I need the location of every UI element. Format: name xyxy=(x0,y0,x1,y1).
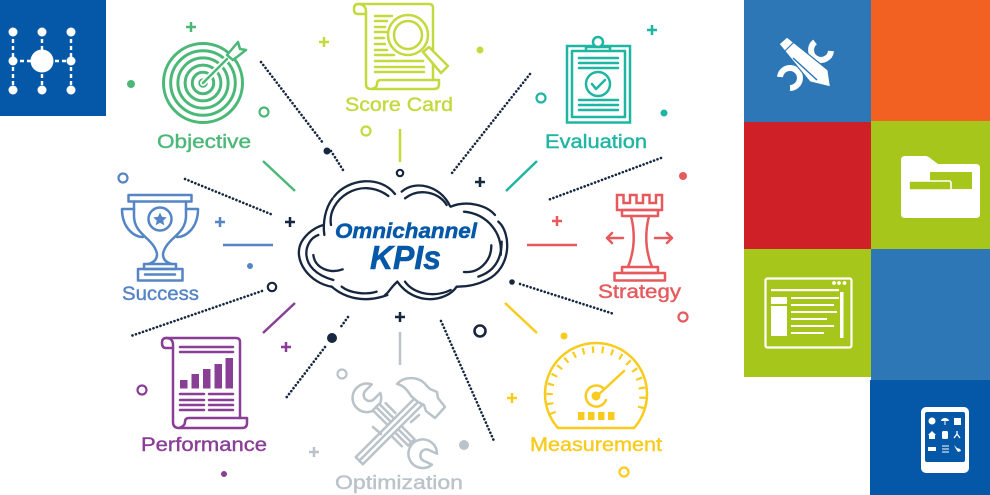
label: Optimization: Optimization xyxy=(335,473,463,494)
tile: orange xyxy=(871,0,990,121)
central cloud: Omnichannel KPIs: Omnichannel xyxy=(335,220,478,243)
performance group xyxy=(138,303,295,477)
label: Measurement: Measurement xyxy=(530,435,663,456)
label: Score Card: Score Card xyxy=(345,95,453,116)
strategy group xyxy=(527,172,688,322)
evaluation group xyxy=(506,25,668,191)
central cloud: Omnichannel KPIs xyxy=(299,181,507,299)
optimization group xyxy=(309,332,469,494)
tile: red xyxy=(744,122,871,249)
label: Success: Success xyxy=(122,284,199,305)
icon: scroll with magnifier xyxy=(354,4,448,89)
tile: tools icon xyxy=(744,0,871,122)
tile: folder icon xyxy=(871,121,990,249)
measurement group xyxy=(505,303,663,476)
tile: blue xyxy=(871,249,990,380)
icon: target with arrow xyxy=(164,42,246,122)
icon: clipboard xyxy=(567,37,630,122)
tile: hub network icon xyxy=(0,0,106,116)
central cloud: Omnichannel KPIs: KPIs xyxy=(370,239,441,276)
objective group xyxy=(127,22,295,191)
icon: speedometer gauge xyxy=(545,343,647,428)
success group xyxy=(118,174,273,305)
label: Objective: Objective xyxy=(157,132,251,153)
dotted radial lines and navy accents xyxy=(131,62,661,441)
score card group xyxy=(319,4,484,162)
tile: window icon xyxy=(744,249,871,377)
icon: report scroll with bars xyxy=(162,338,247,428)
icon: crossed wrench and hammer xyxy=(344,375,447,479)
icon: trophy xyxy=(122,195,198,280)
label: Strategy: Strategy xyxy=(598,282,682,303)
icon: chess rook with arrows xyxy=(607,195,672,280)
label: Performance: Performance xyxy=(141,435,267,456)
tile: tablet icon xyxy=(870,380,990,495)
label: Evaluation: Evaluation xyxy=(545,132,647,153)
